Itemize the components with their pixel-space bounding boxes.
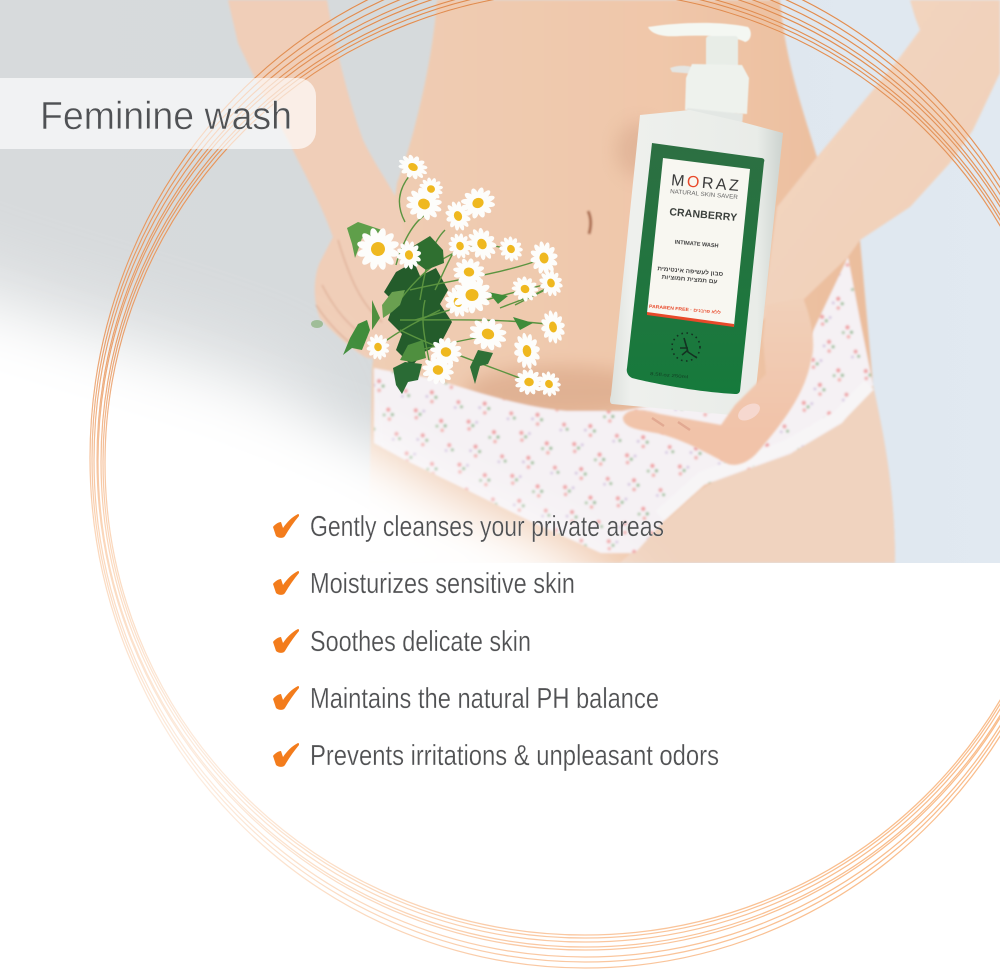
- label text: [649, 174, 738, 378]
- benefit 5: Prevents irritations & unpleasant odors: [310, 740, 719, 772]
- thumb nail: [738, 404, 760, 420]
- photo background: [0, 0, 1000, 563]
- label text: MORAZ: [670, 172, 740, 195]
- benefit 3: Soothes delicate skin: [310, 626, 531, 658]
- label text: INTIMATE WASH: [674, 240, 719, 249]
- title text: Feminine wash: [40, 95, 292, 138]
- shadow above waistband: [466, 362, 640, 411]
- navel: [588, 211, 591, 234]
- white fade over lower left of photo: [0, 314, 628, 563]
- benefits list: [273, 511, 719, 772]
- body: [228, 0, 1000, 563]
- soft shadow behind bottle: [616, 123, 639, 176]
- finger details: [652, 418, 690, 430]
- left arm and fist: [228, 0, 396, 360]
- benefit 4: Maintains the natural PH balance: [310, 683, 659, 715]
- benefit 2: Moisturizes sensitive skin: [310, 568, 575, 600]
- green label: [627, 143, 764, 394]
- label text: NATURAL SKIN SAVER: [670, 189, 739, 201]
- label text: CRANBERRY: [669, 206, 738, 224]
- white label: [647, 158, 750, 326]
- finger lines: [316, 240, 382, 350]
- flower bouquet: [343, 150, 568, 401]
- red stripe: [647, 312, 734, 327]
- underwear: [374, 257, 873, 553]
- stray leaf: [311, 320, 323, 328]
- hand holding the bottle: [623, 298, 813, 465]
- label emblem: [672, 333, 700, 361]
- bottle body: [610, 110, 783, 417]
- label text: סבון לעשיפה אינטימית: [657, 264, 723, 278]
- daisies: [352, 150, 568, 401]
- benefit 1: Gently cleanses your private areas: [310, 511, 664, 543]
- lace trim: [660, 385, 869, 516]
- leaves: [343, 222, 533, 394]
- leg: [620, 385, 895, 563]
- wide soft fade at the far left: [0, 268, 308, 415]
- torso and hips: [368, 0, 895, 563]
- pump: [648, 23, 751, 126]
- right arm: [762, 0, 1000, 320]
- shampoo bottle: [610, 23, 783, 417]
- label text: PARABEN FREE · ללא פרבנים: [649, 304, 721, 315]
- stems: [386, 177, 544, 378]
- photo: woman holding bottle and flowers: [0, 0, 1000, 563]
- title pill: [0, 78, 316, 149]
- dense green core: [384, 262, 452, 366]
- label text: 8.5fl.oz 250ml: [650, 371, 688, 379]
- label text: עם תמצית חמוציות: [661, 275, 718, 286]
